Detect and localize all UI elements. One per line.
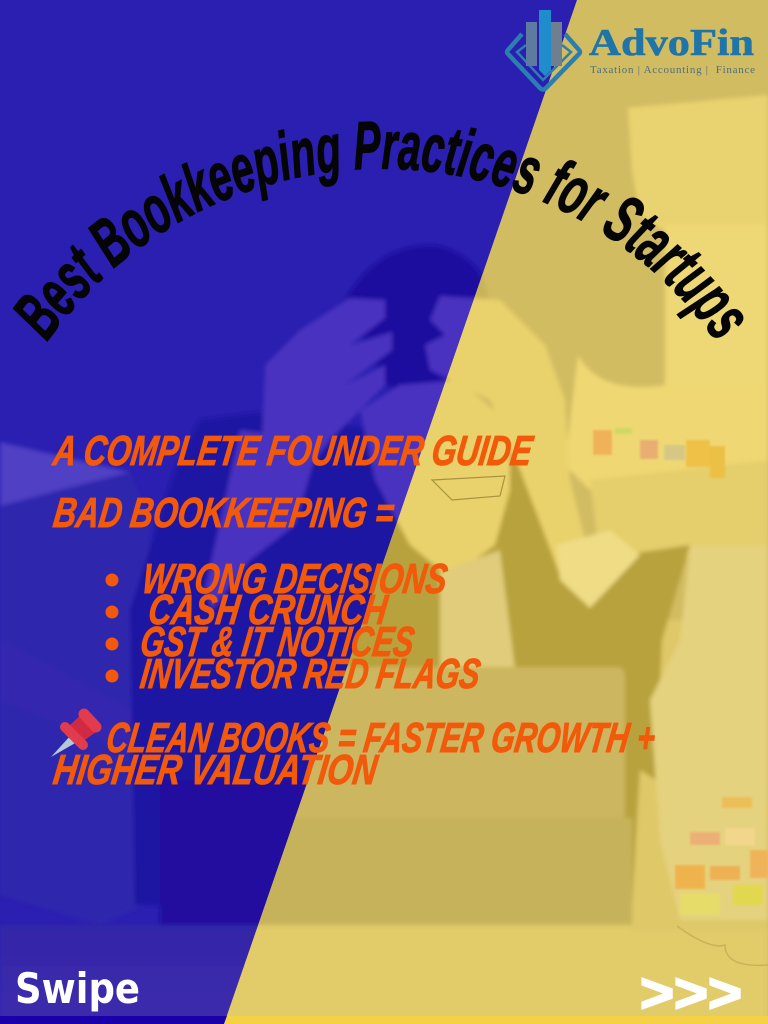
item: investor red flags: INVESTOR RED FLAGS bbox=[138, 650, 483, 697]
photo: mouse cable bbox=[677, 926, 768, 965]
item: cash crunch: CASH CRUNCH bbox=[146, 586, 391, 633]
bullet 1 bbox=[106, 574, 118, 586]
text: founder guide heading: A COMPLETE FOUNDER GUIDE bbox=[50, 427, 537, 474]
logo tagline: Taxation | Accounting | Finance bbox=[590, 64, 755, 76]
photo: blue-toned side bbox=[0, 244, 483, 1016]
photo: glasses bbox=[432, 476, 505, 500]
bottom strip: yellow bbox=[224, 1016, 768, 1024]
list: consequences bbox=[106, 555, 483, 697]
item: wrong decisions: WRONG DECISIONS bbox=[140, 555, 450, 602]
bullet 3 bbox=[106, 638, 118, 650]
item: GST and IT notices: GST & IT NOTICES bbox=[138, 618, 417, 665]
logo: AdvoFin bbox=[507, 10, 755, 90]
bottom strip: blue bbox=[0, 1016, 227, 1024]
icon: push pin bbox=[51, 712, 96, 757]
panel: blue diagonal background bbox=[0, 0, 577, 1024]
panel: yellow diagonal background bbox=[224, 0, 768, 1024]
title: curved heading: Best Bookkeeping Practices for Startups bbox=[12, 121, 744, 342]
logo wordmark: AdvoFin bbox=[589, 22, 754, 64]
text: swipe: Swipe bbox=[15, 964, 140, 1013]
photo: yellow-toned side bbox=[225, 94, 768, 1021]
logo icon: diamond with bars bbox=[507, 10, 580, 90]
bullet 2 bbox=[106, 606, 118, 618]
arrow: next-page chevrons: >>> bbox=[640, 961, 742, 1024]
text: bad bookkeeping heading: BAD BOOKKEEPING = bbox=[51, 489, 397, 536]
text: clean books line two: HIGHER VALUATION bbox=[51, 746, 381, 793]
bullet 4 bbox=[106, 670, 118, 682]
photo: sticky notes bbox=[593, 428, 768, 915]
